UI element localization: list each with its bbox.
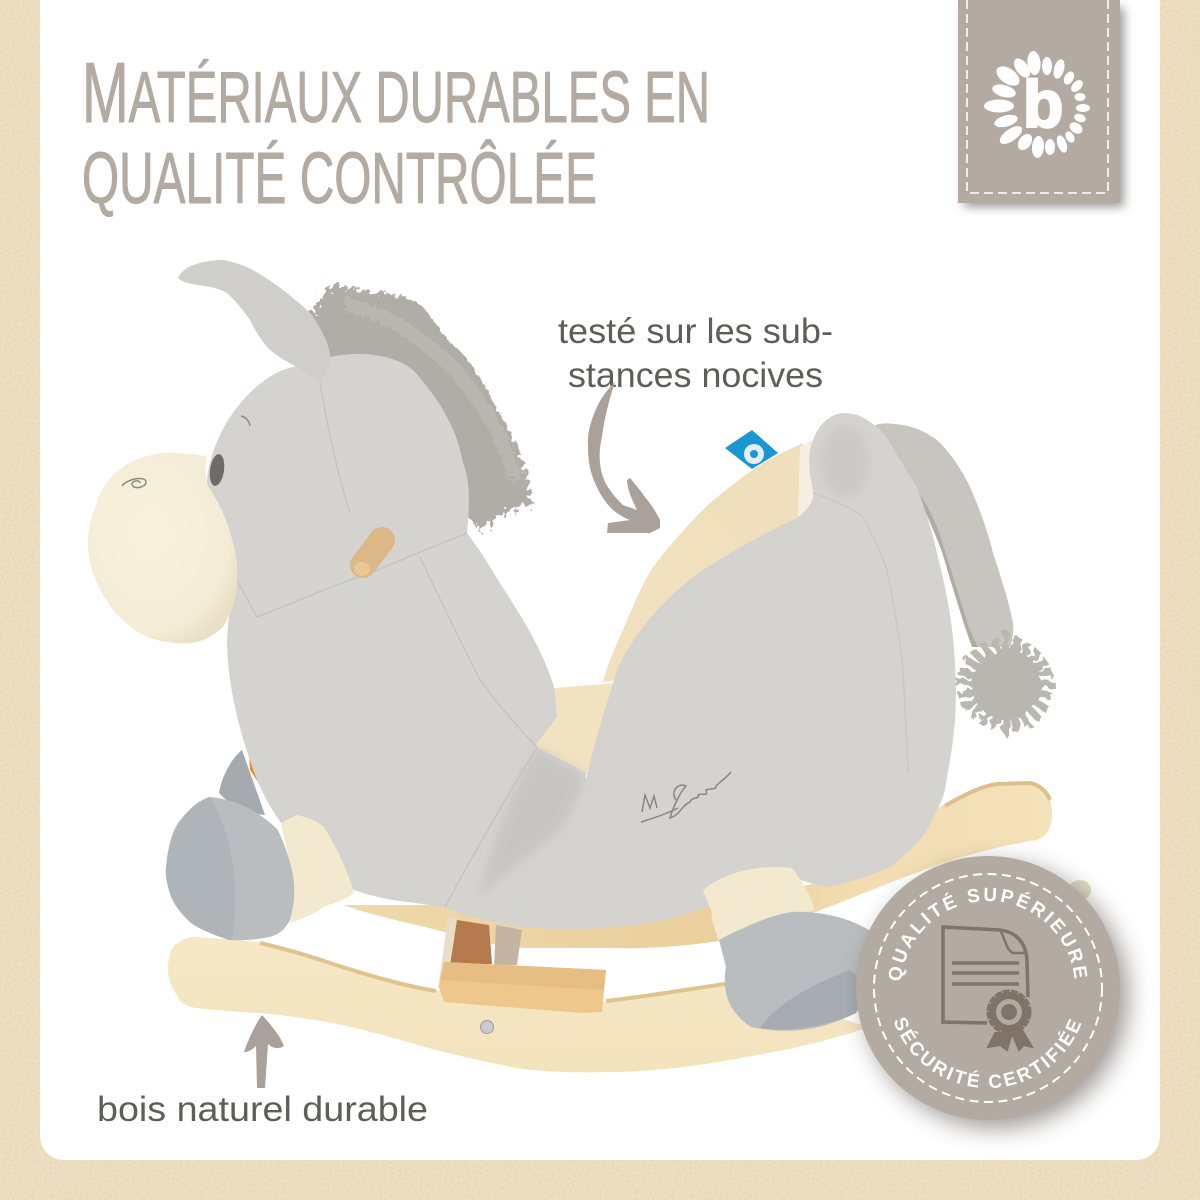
muzzle	[88, 453, 237, 643]
icon: certificate document with seal	[943, 927, 1032, 1050]
rear body of the donkey	[500, 413, 956, 929]
rear rocker	[343, 782, 1091, 948]
title: QUALITÉ CONTRÔLÉE	[82, 139, 597, 219]
eye	[208, 416, 250, 487]
certification badge	[850, 848, 1144, 1144]
callout: harmful substances tested: testé sur les sub-	[558, 312, 833, 351]
cream seat	[535, 682, 630, 785]
wooden handle	[354, 540, 382, 576]
badge text bottom: SÉCURITÉ CERTIFIÉE	[894, 1018, 1082, 1088]
logo: petals and letter b: b	[1023, 67, 1063, 141]
front body and head	[207, 354, 586, 928]
mane	[285, 283, 532, 530]
shaded wedge under seat	[478, 748, 585, 900]
callout: harmful substances tested: stances nocives	[568, 356, 823, 395]
rear leg and hoof	[703, 867, 870, 1031]
front rocker	[168, 937, 870, 1072]
tail	[875, 423, 1054, 736]
arrow: pointing to the seat	[588, 382, 660, 533]
badge text top: QUALITÉ SUPÉRIEURE	[888, 888, 1088, 980]
inner back of seat	[603, 440, 815, 682]
wooden post and cross bar	[438, 918, 606, 1013]
callout: harmful substances tested	[558, 312, 833, 395]
brand tag with logo	[958, 0, 1124, 207]
title: MATÉRIAUX DURABLES EN	[82, 46, 710, 141]
arrow: pointing to the wood	[244, 1015, 284, 1088]
ear	[178, 260, 330, 383]
blue label	[725, 430, 778, 469]
tail pompom	[956, 632, 1054, 736]
logo: petals and letter b	[984, 50, 1090, 158]
front leg and hoof	[166, 797, 354, 940]
callout: natural durable wood: bois naturel durable	[97, 1090, 428, 1129]
signature	[641, 772, 731, 822]
title	[82, 46, 710, 219]
far front hoof and embroidery	[219, 750, 265, 815]
